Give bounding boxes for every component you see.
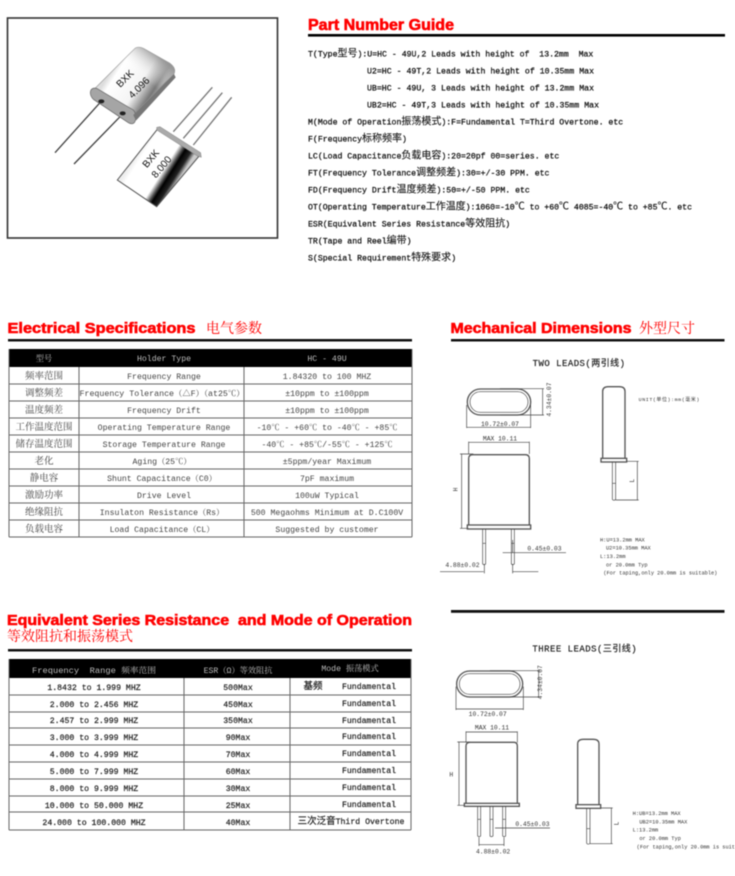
table: electrical specifications: 频率范围: [25, 370, 63, 382]
table: electrical specifications: Drive Level: [137, 491, 191, 501]
table: ESR and mode of operation: 60Max: [226, 768, 250, 777]
diagram: three leads: MAX 10.11: [475, 725, 509, 732]
diagram title: THREE LEADS(三引线): [532, 643, 637, 655]
heading: equivalent series resistance and mode of operation: [7, 612, 412, 652]
heading: mechanical dimensions: [450, 320, 724, 342]
table: electrical specifications: Shunt Capacitance（C0）: [107, 474, 217, 484]
table header row: 型号: [36, 353, 52, 364]
heading: equivalent series resistance and mode of operation: Equivalent Series Resistance and Mode of Operation: [7, 612, 412, 629]
text block: part number guide list: M(Mode of Operation振荡模式):F=Fundamental T=Third Overtone. etc: [308, 114, 623, 128]
diagram: two leads: 10.72±0.07: [481, 421, 519, 428]
heading: mechanical dimensions: 外型尺寸: [639, 320, 695, 337]
table: ESR and mode of operation: 1.8432 to 1.999 MHZ: [47, 684, 141, 693]
table: electrical specifications: [9, 349, 412, 537]
diagram: two leads: 0.45±0.03: [527, 545, 562, 552]
dimension notes: H:UB=13.2mm MAX: [633, 811, 681, 817]
table: ESR and mode of operation: Fundamental: [342, 800, 396, 810]
table: electrical specifications: Frequency Drift: [127, 406, 201, 416]
table: electrical specifications: ±10ppm to ±100ppm: [285, 390, 369, 399]
table: electrical specifications: 调整频差: [25, 387, 63, 399]
diagram: three leads: 10.72±0.07: [469, 711, 507, 718]
table: ESR and mode of operation: 10.000 to 50.000 MHZ: [45, 802, 143, 811]
diagram: two leads: MAX 10.11: [483, 435, 517, 442]
table: ESR and mode of operation: Fundamental: [342, 716, 396, 726]
diagram: three leads: 4.88±0.02: [476, 848, 510, 855]
dimension notes: U2=10.35mm MAX: [606, 546, 652, 552]
text block: part number guide list: [308, 46, 692, 264]
table: ESR and mode of operation: 25Max: [226, 802, 250, 811]
text block: part number guide list: T(Type型号):U=HC - 49U,2 Leads with height of 13.2mm Max: [308, 46, 593, 60]
dimension notes: (For taping,only 20.0mm is suitable): [603, 571, 717, 577]
table: ESR and mode of operation: 24.000 to 100.000 MHZ: [42, 819, 146, 828]
table: ESR and mode of operation: 3.000 to 3.999 MHZ: [50, 734, 138, 743]
text block: part number guide list: S(Special Requirement特殊要求): [308, 250, 456, 264]
dimension notes: [600, 537, 717, 577]
table: electrical specifications: 100uW Typical: [295, 491, 359, 501]
table header row: Mode 振荡模式: [321, 663, 379, 674]
table: electrical specifications: ±10ppm to ±100ppm: [285, 407, 369, 416]
table: ESR and mode of operation: 2.457 to 2.999 MHZ: [50, 717, 138, 726]
table: electrical specifications: 储存温度范围: [15, 438, 73, 450]
diagram title: TWO LEADS(两引线): [533, 357, 625, 369]
dimension notes: [633, 811, 735, 850]
table: electrical specifications: Operating Temperature Range: [98, 423, 230, 433]
icon: crystal with three leads: BXK: [141, 148, 162, 170]
diagram: three leads: H: [449, 772, 453, 779]
side view: [601, 387, 639, 500]
text block: part number guide list: F(Frequency标称频率): [308, 132, 407, 146]
table: ESR and mode of operation: [9, 659, 411, 830]
text block: part number guide list: FT(Frequency Tolerance调整频差):30=+/-30 PPM. etc: [308, 166, 550, 180]
dimension notes: L:13.2mm: [633, 828, 658, 834]
table: electrical specifications: ±5ppm/year Maximum: [283, 457, 371, 467]
table: electrical specifications: -10℃ - +60℃ to -40℃ - +85℃: [257, 423, 397, 433]
table: electrical specifications: 500 Megaohms Minimum at D.C100V: [251, 508, 403, 518]
table: ESR and mode of operation: 4.000 to 4.999 MHZ: [50, 751, 138, 760]
heading: electrical specifications: [8, 320, 412, 342]
table header row: ESR（Ω）等效阻抗: [204, 665, 272, 676]
table: electrical specifications: Frequency Range: [127, 373, 201, 382]
side view: L: [629, 479, 636, 483]
icon: crystal with two leads: BXK: [115, 68, 137, 90]
text block: part number guide list: UB2=HC - 49T,3 Leads with height of 10.35mm Max: [367, 100, 599, 110]
text block: part number guide list: TR(Tape and Reel编带): [308, 234, 412, 248]
table: electrical specifications: 工作温度范围: [15, 421, 73, 433]
dimension notes: (For taping,only 20.0mm is suit: [637, 844, 735, 850]
table: ESR and mode of operation: 30Max: [226, 785, 250, 794]
side view: [576, 739, 621, 844]
table: electrical specifications: 温度频差: [25, 404, 63, 416]
heading: equivalent series resistance and mode of operation: 等效阻抗和振荡模式: [7, 628, 133, 645]
diagram: two leads: 4.88±0.02: [445, 562, 480, 569]
icon: crystal with three leads: [117, 87, 232, 207]
table header row: HC - 49U: [307, 355, 347, 364]
table: ESR and mode of operation: Fundamental: [342, 682, 396, 692]
diagram: three leads: [449, 643, 735, 855]
table: electrical specifications: 激励功率: [25, 489, 63, 501]
table: electrical specifications: 静电容: [30, 472, 59, 484]
table: ESR and mode of operation: 450Max: [223, 701, 253, 710]
icon: crystal with two leads: [55, 47, 176, 164]
table header row: Holder Type: [137, 354, 191, 364]
dimension notes: L:13.2mm: [600, 554, 626, 560]
icon: crystal with two leads: 4.096: [127, 75, 153, 101]
diagram: three leads: 4.34±0.07: [537, 665, 544, 699]
dimension notes: or 20.0mm Typ: [639, 836, 681, 842]
table: ESR and mode of operation: Fundamental: [342, 699, 396, 709]
table: electrical specifications: -40℃ - +85℃/-55℃ - +125℃: [261, 440, 393, 450]
table: electrical specifications: 1.84320 to 100 MHZ: [283, 373, 371, 382]
diagram: two leads: [440, 357, 717, 577]
table: electrical specifications: Load Capacitance（CL）: [110, 525, 214, 535]
text block: part number guide list: UB=HC - 49U, 3 Leads with height of 13.2mm Max: [367, 84, 594, 94]
table: electrical specifications: 7pF maximum: [300, 474, 354, 484]
table: electrical specifications: Insulaton Resistance（Rs）: [100, 508, 224, 518]
heading: mechanical dimensions: Mechanical Dimensions: [450, 320, 632, 337]
table: electrical specifications: 负载电容: [25, 523, 63, 535]
table: ESR and mode of operation: 5.000 to 7.999 MHZ: [50, 768, 138, 777]
table: electrical specifications: Frequency Tolerance（△F）（at25℃）: [80, 389, 244, 399]
dimension notes: UB2=10.35mm MAX: [639, 819, 688, 825]
text block: part number guide list: FD(Frequency Drift温度频差):50=+/-50 PPM. etc: [308, 182, 530, 196]
table: ESR and mode of operation: 2.000 to 2.456 MHZ: [50, 701, 138, 710]
diagram: two leads: H: [452, 487, 459, 491]
table: ESR and mode of operation: 8.000 to 9.999 MHZ: [50, 785, 138, 794]
text block: part number guide list: LC(Load Capacitance负载电容):20=20pf 00=series. etc: [308, 148, 559, 162]
table: ESR and mode of operation: Fundamental: [342, 749, 396, 759]
table: electrical specifications: Storage Temperature Range: [103, 441, 225, 450]
icon: crystal with three leads: 8.000: [150, 154, 175, 181]
table: ESR and mode of operation: 40Max: [226, 819, 250, 828]
table: ESR and mode of operation: 350Max: [223, 717, 253, 726]
divider above three leads: [451, 610, 724, 613]
table: electrical specifications: Aging（25℃）: [133, 457, 191, 467]
text block: part number guide list: ESR(Equivalent Series Resistance等效阻抗): [308, 216, 510, 230]
table: ESR and mode of operation: Fundamental: [342, 732, 396, 742]
table: ESR and mode of operation: 三次泛音Third Overtone: [298, 815, 404, 827]
table: ESR and mode of operation: 90Max: [226, 734, 250, 743]
table: ESR and mode of operation: 基频: [303, 680, 323, 692]
heading: electrical specifications: Electrical Specifications: [8, 320, 196, 337]
heading: part number guide: Part Number Guide: [308, 17, 454, 34]
text block: part number guide list: U2=HC - 49T,2 Leads with height of 10.35mm Max: [367, 66, 594, 76]
heading: electrical specifications: 电气参数: [206, 320, 262, 337]
diagram: three leads: 0.45±0.03: [515, 821, 550, 828]
table: electrical specifications: 老化: [34, 455, 54, 467]
table: ESR and mode of operation: Fundamental: [342, 766, 396, 776]
diagram: two leads: UNIT(单位):mm(毫米): [639, 396, 699, 403]
table: electrical specifications: Suggested by customer: [275, 525, 379, 535]
table: ESR and mode of operation: 500Max: [223, 684, 253, 693]
table header row: [32, 663, 379, 676]
dimension notes: H:U=13.2mm MAX: [600, 537, 646, 543]
table header row: Frequency Range 频率范围: [32, 665, 156, 676]
table: electrical specifications: 绝缘阻抗: [25, 506, 63, 518]
panel: product photo: [8, 18, 278, 238]
table: ESR and mode of operation: Fundamental: [342, 783, 396, 793]
table header row: [36, 353, 347, 364]
diagram: two leads: 4.34±0.07: [546, 382, 553, 417]
table: ESR and mode of operation: 70Max: [226, 751, 250, 760]
side view: L: [614, 821, 621, 825]
dimension notes: or 20.0mm Typ: [606, 562, 648, 568]
text block: part number guide list: OT(Operating Temperature工作温度):1060=-10℃ to +60℃ 4085=-40℃ to +85℃. etc: [308, 200, 692, 214]
